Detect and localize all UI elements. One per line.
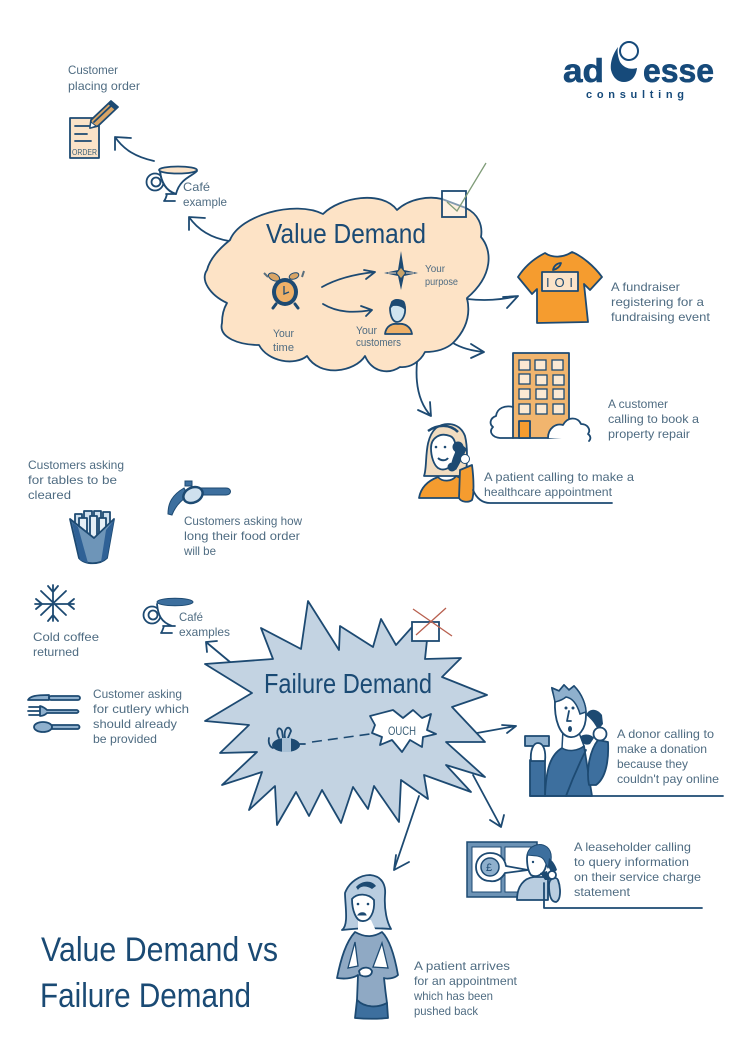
text: food order wait	[183, 514, 302, 558]
text: cafe examples	[179, 610, 230, 639]
text: your time	[273, 328, 294, 354]
icon: order pad and pencil: ORDER	[72, 147, 97, 157]
text: your customers	[356, 325, 401, 349]
text: cafe examples: examples	[179, 625, 230, 639]
text: fundraiser: A fundraiser	[611, 280, 680, 294]
text: your purpose	[425, 263, 458, 288]
text: tables to be cleared: for tables to be	[28, 473, 117, 487]
text: patient arrives: A patient arrives	[414, 959, 510, 973]
text: asking for cutlery: for cutlery which	[93, 702, 189, 716]
arrow: time to purpose	[322, 270, 375, 287]
text: customer placing order: placing order	[68, 79, 140, 93]
icon: fries basket	[70, 511, 114, 563]
text: cafe example: example	[183, 195, 227, 209]
icon: bee	[269, 728, 305, 752]
text: donor calling: couldn't pay online	[617, 772, 719, 786]
panel: value demand cloud	[205, 198, 489, 371]
icon: order pad and pencil	[70, 101, 118, 158]
text: patient arrives	[413, 959, 518, 1018]
panel: failure demand burst	[205, 601, 487, 825]
callout: ouch: OUCH	[388, 724, 416, 738]
logo: adesse consulting: ad	[563, 52, 604, 89]
text: your time: Your	[273, 328, 294, 340]
title: value demand vs failure demand: Failure Demand	[40, 977, 251, 1015]
text: patient arrives: for an appointment	[414, 974, 518, 988]
dashed line: bee to ouch	[312, 734, 370, 742]
icon: man on phone with card	[525, 685, 723, 796]
text: fundraiser	[611, 280, 711, 324]
logo: adesse consulting: esse	[643, 52, 714, 89]
arrow: burst to cafe	[206, 641, 230, 662]
text: food order wait: will be	[183, 544, 216, 558]
text: your purpose: purpose	[425, 276, 458, 288]
logo: adesse consulting: consulting	[586, 89, 684, 101]
icon: leaseholder with window	[467, 842, 702, 908]
text: leaseholder calling: to query information	[574, 855, 689, 869]
icon: office building with clouds	[491, 353, 590, 441]
heading: failure demand: Failure Demand	[264, 668, 432, 699]
text: donor calling	[617, 727, 719, 786]
text: asking for cutlery: should already	[93, 717, 177, 731]
icon: tick box	[442, 163, 486, 217]
text: cafe example: Café	[183, 180, 210, 194]
arrow: cloud to t-shirt	[467, 296, 518, 308]
text: tables to be cleared	[28, 458, 124, 502]
text: cold coffee	[33, 630, 99, 659]
text: tables to be cleared: cleared	[28, 488, 71, 502]
heading: value demand: Value Demand	[266, 218, 426, 249]
text: customer placing order	[68, 63, 140, 93]
text: leaseholder calling: A leaseholder calling	[574, 840, 691, 854]
text: donor calling: make a donation	[617, 742, 707, 756]
text: patient calling: A patient calling to make a	[484, 470, 634, 484]
icon: cutlery	[28, 695, 80, 732]
text: asking for cutlery	[93, 687, 189, 746]
text: cafe examples: Café	[179, 610, 203, 624]
text: donor calling: because they	[617, 757, 688, 771]
icon: leaseholder with window: £	[486, 862, 492, 874]
icon: customer person	[385, 299, 412, 334]
text: fundraiser: fundraising event	[611, 310, 711, 324]
text: your purpose: Your	[425, 263, 445, 275]
text: cold coffee: returned	[33, 645, 79, 659]
text: property repair	[608, 397, 699, 441]
icon: cafe cup	[146, 166, 197, 201]
text: property repair: calling to book a	[608, 412, 699, 426]
text: property repair: property repair	[608, 427, 690, 441]
text: food order wait: Customers asking how	[184, 514, 302, 528]
text: patient calling: healthcare appointment	[484, 485, 613, 499]
arrow: cloud to patient caller	[417, 362, 431, 416]
text: tables to be cleared: Customers asking	[28, 458, 124, 472]
text: leaseholder calling: on their service charge	[574, 870, 701, 884]
title: value demand vs failure demand: Value Demand vs	[41, 931, 278, 969]
icon: compass	[384, 251, 418, 290]
text: fundraiser: registering for a	[611, 295, 704, 309]
icon: woman on telephone	[419, 424, 612, 503]
text: property repair: A customer	[608, 397, 668, 411]
icon: alarm clock	[264, 271, 304, 308]
icon: snowflake	[35, 585, 74, 621]
text: donor calling: A donor calling to	[617, 727, 714, 741]
text: your customers: customers	[356, 337, 401, 349]
text: asking for cutlery: Customer asking	[93, 687, 182, 701]
text: patient arrives: pushed back	[414, 1004, 479, 1018]
icon: orange t-shirt: IOI	[546, 275, 573, 290]
text: patient arrives: which has been	[413, 989, 493, 1003]
text: asking for cutlery: be provided	[93, 732, 157, 746]
text: customer placing order: Customer	[68, 63, 118, 77]
icon: wristwatch	[168, 481, 230, 515]
title: value demand vs failure demand	[40, 931, 278, 1015]
callout: ouch	[370, 710, 436, 752]
text: leaseholder calling	[574, 840, 701, 899]
icon: failure cafe cup	[144, 598, 193, 633]
arrow: burst to leaseholder	[473, 775, 504, 827]
arrow: cafe to order	[115, 137, 154, 161]
text: leaseholder calling: statement	[574, 885, 631, 899]
text: cold coffee: Cold coffee	[33, 630, 99, 644]
arrow: burst to patient	[394, 796, 419, 870]
text: your time: time	[273, 342, 294, 354]
arrow: time to customers	[323, 304, 372, 316]
icon: worried patient woman	[337, 875, 398, 1019]
text: your customers: Your	[356, 325, 377, 337]
icon: cross box	[412, 608, 452, 641]
arrow: cloud to cafe	[189, 217, 229, 241]
text: patient calling	[484, 470, 634, 499]
logo: adesse consulting	[563, 42, 714, 101]
text: food order wait: long their food order	[184, 529, 300, 543]
arrow: burst to donor	[477, 725, 516, 733]
arrow: cloud to building	[453, 343, 484, 358]
icon: orange t-shirt	[518, 252, 602, 323]
text: cafe example	[183, 180, 227, 209]
